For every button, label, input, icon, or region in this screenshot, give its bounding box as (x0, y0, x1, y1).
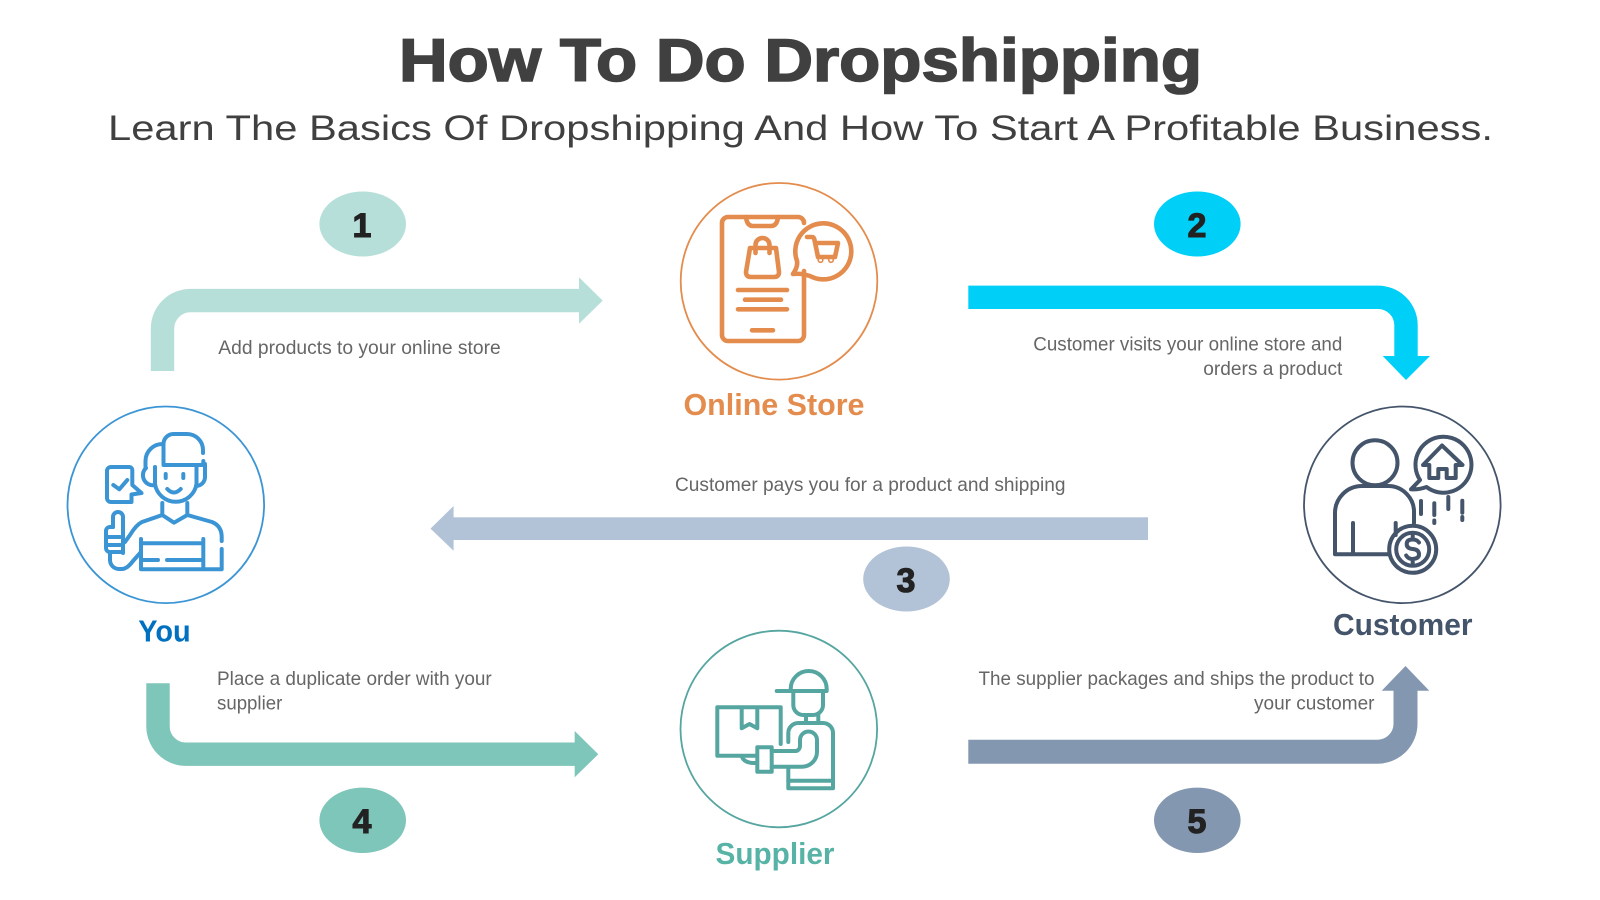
title: How To Do Dropshipping (399, 27, 1202, 94)
step 2: description (1033, 334, 1343, 380)
step 3: description: Customer pays you for a product and shipping (675, 474, 1066, 496)
step 2: number badge: 2 (1188, 207, 1206, 245)
node: Customer (1304, 406, 1501, 642)
label: You: You (138, 614, 191, 649)
icon: man with thumbs up and checkmark bubble (106, 434, 222, 569)
step 1: description: Add products to your online store (218, 337, 501, 359)
step 4: description: supplier (217, 692, 283, 714)
step 5: arrow from Supplier to Customer (968, 666, 1429, 752)
step 2: number badge (1154, 192, 1241, 256)
step 5: number badge: 5 (1188, 803, 1206, 841)
label: Supplier: Supplier (716, 836, 834, 871)
step 1: arrow from You to Online Store (162, 277, 603, 371)
step 4: arrow from You to Supplier (158, 683, 598, 777)
step 1: number badge: 1 (353, 207, 371, 245)
label: Online Store: Online Store (684, 387, 864, 422)
step 3: number badge: 3 (897, 562, 915, 600)
icon: person with home bubble and coin (1335, 437, 1471, 573)
step 4: number badge (319, 788, 406, 853)
label: Customer: Customer (1333, 607, 1472, 642)
step 2: description: orders a product (1203, 358, 1343, 380)
node: Online Store (681, 183, 877, 422)
step 3: number badge (863, 546, 950, 612)
step 4: number badge: 4 (353, 803, 372, 841)
node: You (68, 406, 264, 649)
step 4: description: Place a duplicate order with your (217, 668, 492, 690)
icon: phone with shopping bag and cart bubble (722, 217, 851, 341)
subtitle: Learn The Basics Of Dropshipping And How To Start A Profitable Business. (108, 109, 1493, 148)
step 5: description: your customer (1254, 692, 1375, 714)
step 2: arrow from Online Store to Customer (968, 297, 1430, 380)
icon: delivery man holding a box (717, 671, 833, 788)
node: Supplier (680, 631, 877, 871)
step 1: number badge (319, 192, 406, 256)
step 5: description (978, 668, 1375, 714)
step 2: description: Customer visits your online store and (1033, 334, 1342, 356)
step 5: description: The supplier packages and ships the product to (978, 668, 1375, 690)
step 3: arrow from Customer to You (430, 506, 1148, 551)
step 5: number badge (1154, 788, 1241, 853)
step 4: description (217, 668, 492, 714)
